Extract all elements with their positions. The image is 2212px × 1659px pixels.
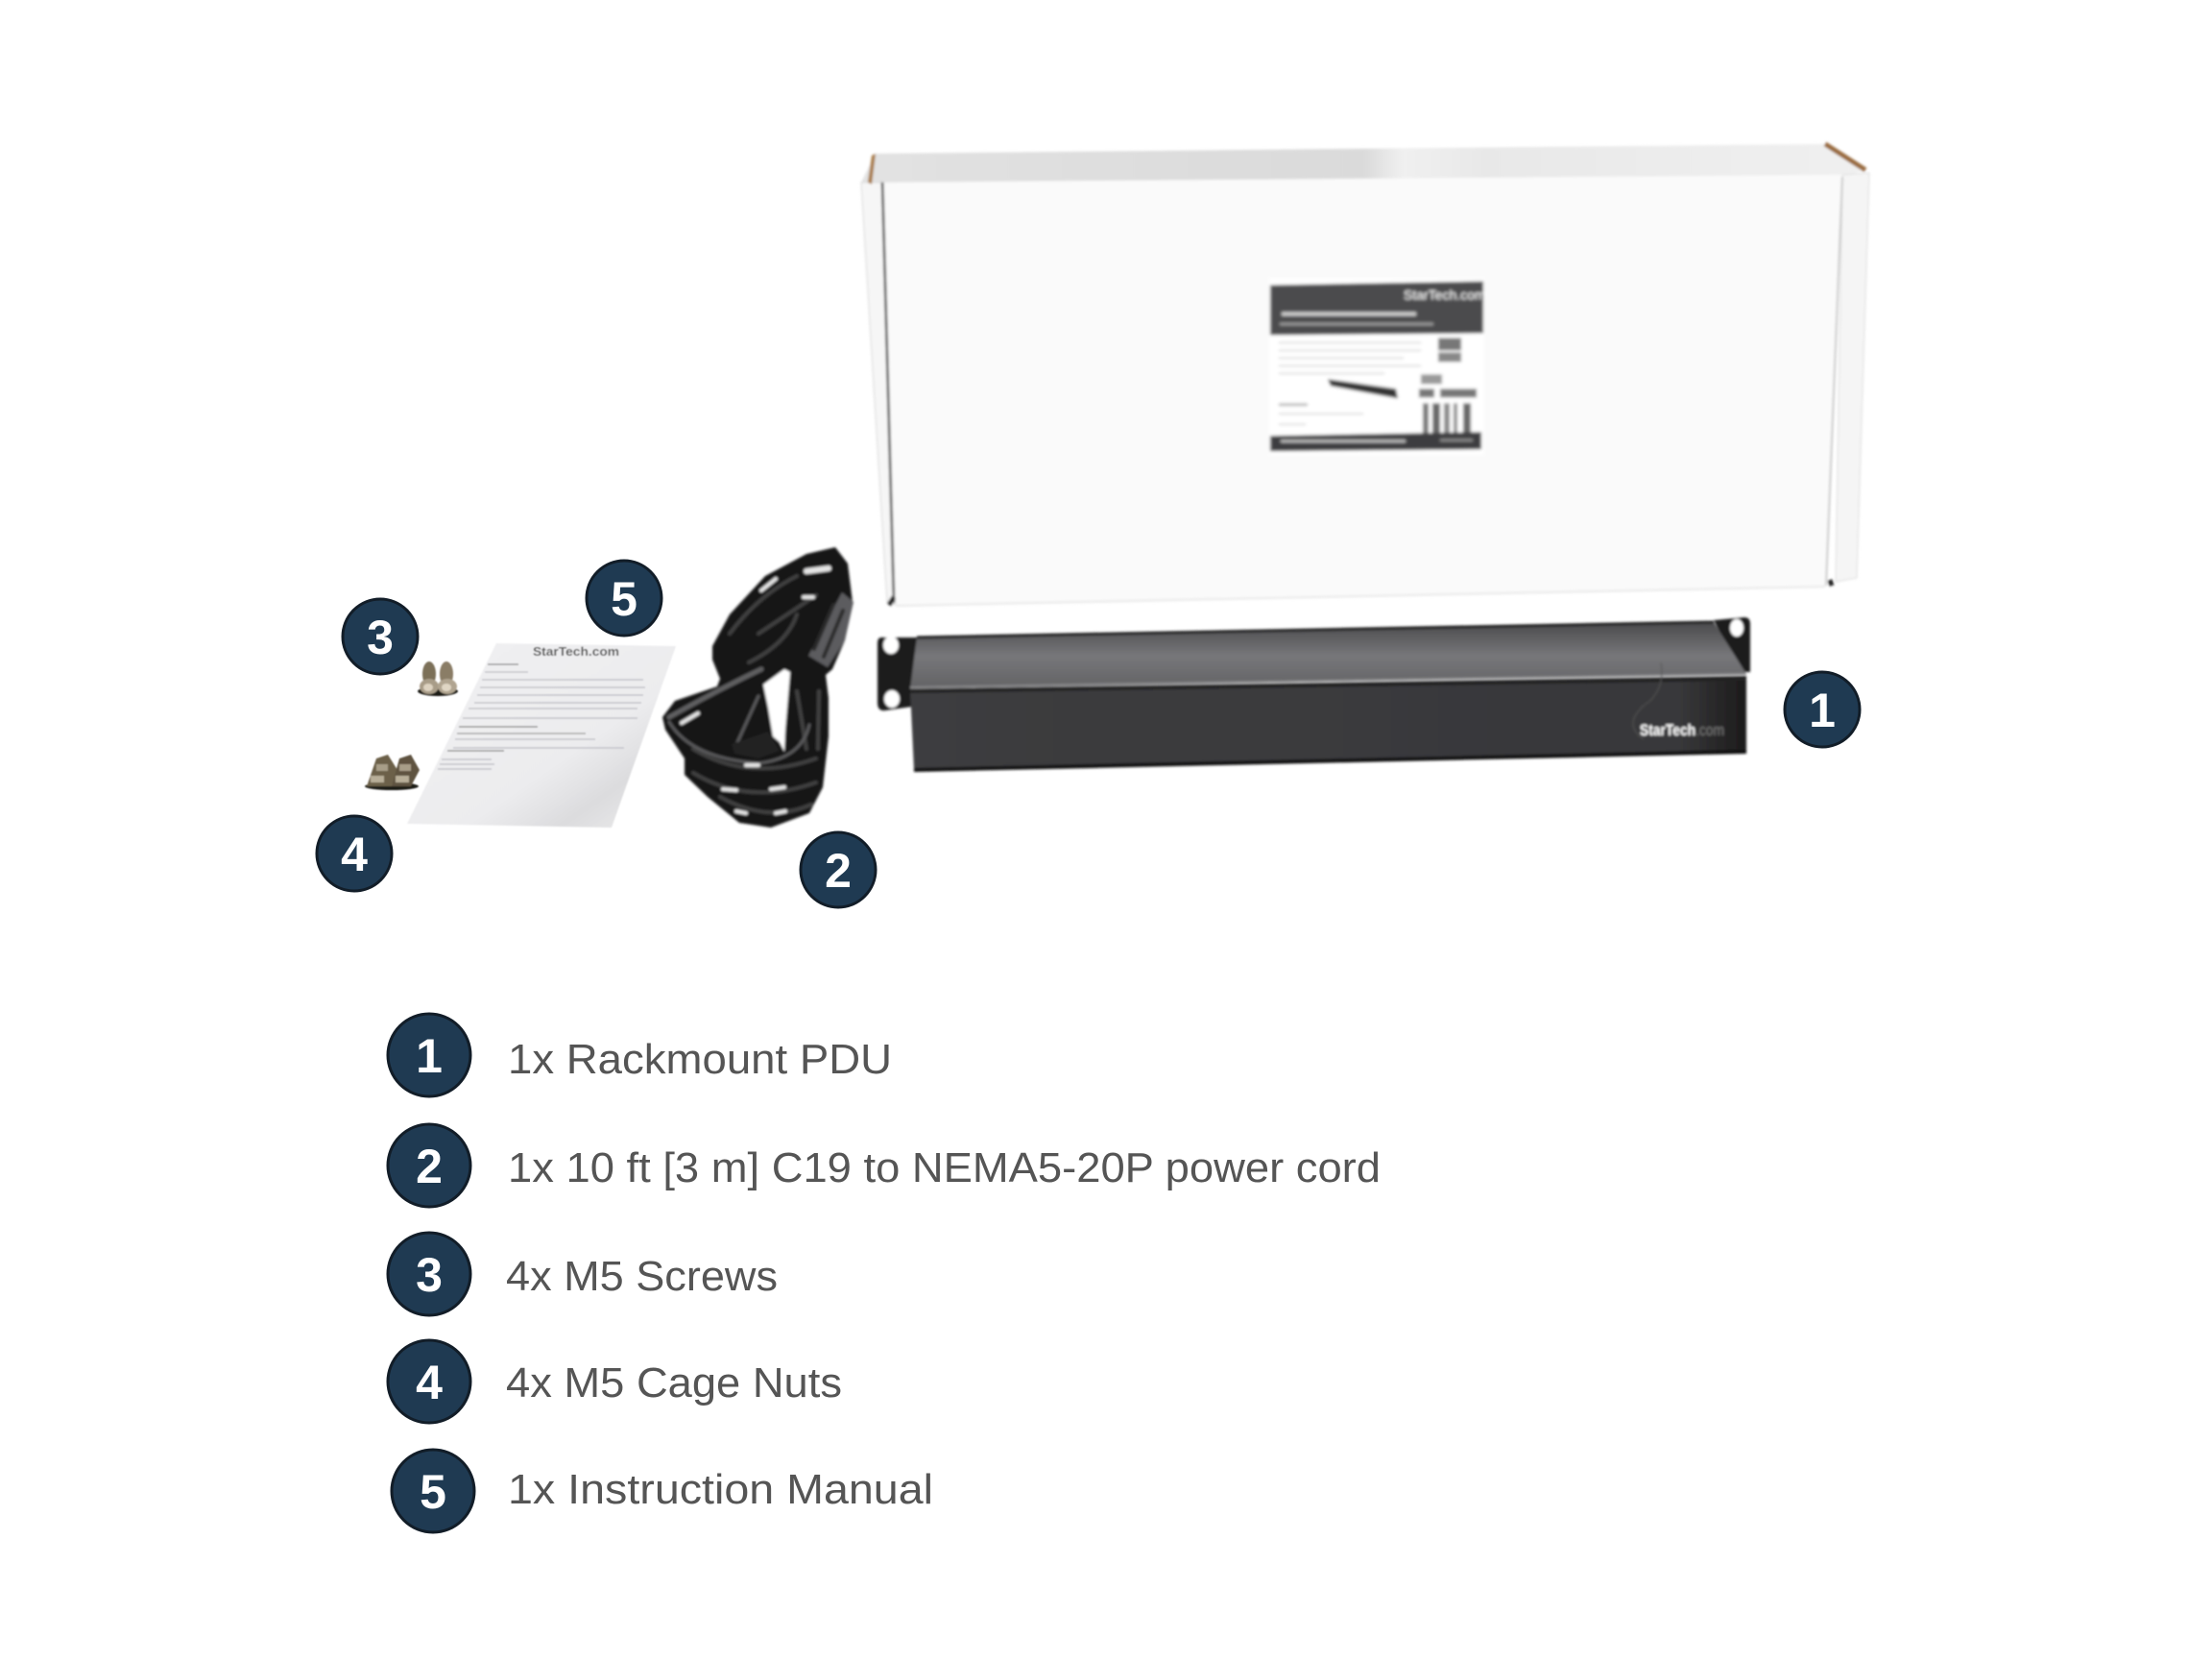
callout badge 3: 3	[367, 611, 394, 664]
callout badge 4	[317, 816, 392, 891]
list item 4: 4x M5 Cage Nuts	[506, 1359, 842, 1407]
product box	[861, 144, 1869, 606]
callout badge 2: 2	[825, 844, 852, 898]
list item 5: 1x Instruction Manual	[508, 1466, 933, 1513]
box left flap	[861, 182, 896, 605]
list item 1: 1x Rackmount PDU	[508, 1036, 892, 1083]
PDU logo: StarTech.com	[1640, 721, 1724, 739]
box right flap	[1836, 173, 1869, 582]
list item 4: 4	[416, 1356, 443, 1409]
list item 5: 5	[420, 1465, 446, 1519]
box front face	[884, 175, 1842, 605]
PDU left ear	[878, 637, 920, 710]
callout badge 2	[801, 832, 876, 907]
list item 2	[388, 1124, 1381, 1207]
list item 2: 2	[416, 1140, 443, 1193]
list item 3	[388, 1233, 778, 1315]
contents list	[388, 1014, 1381, 1532]
M5 screws	[418, 661, 458, 696]
list item 1	[388, 1014, 892, 1096]
callout badge 4: 4	[341, 828, 368, 881]
cord plug grey band	[808, 592, 854, 667]
manual logo: StarTech.com	[533, 644, 619, 659]
power cord	[662, 547, 854, 828]
M5 cage nuts	[365, 755, 420, 790]
cord silhouette	[662, 547, 853, 828]
callout badge 5: 5	[611, 572, 637, 626]
box shipping label	[1269, 278, 1486, 455]
list item 4	[388, 1340, 842, 1423]
cord strand highlight	[669, 669, 761, 717]
list item 2: 1x 10 ft [3 m] C19 to NEMA5-20P power cord	[508, 1144, 1381, 1191]
list item 1: 1	[416, 1029, 443, 1083]
cord highlights	[682, 568, 829, 813]
list item 3: 3	[416, 1248, 443, 1302]
cord strand shading	[693, 576, 819, 812]
rackmount PDU	[878, 617, 1750, 770]
list item 5	[392, 1450, 933, 1532]
PDU mounting holes	[883, 619, 1743, 708]
PDU top face	[910, 622, 1746, 689]
callout badge 5	[587, 561, 661, 636]
PDU right ear	[1714, 617, 1750, 672]
callout badge 3	[343, 599, 418, 674]
box shipping label: StarTech.com	[1404, 287, 1486, 302]
instruction manual	[407, 643, 676, 828]
cord plug end	[732, 732, 780, 758]
cord white gap	[763, 669, 790, 752]
callout badge 1	[1785, 672, 1860, 747]
PDU front face	[910, 676, 1746, 770]
box top flap	[861, 144, 1865, 184]
list item 3: 4x M5 Screws	[506, 1253, 778, 1300]
callout badge 1: 1	[1809, 684, 1836, 737]
